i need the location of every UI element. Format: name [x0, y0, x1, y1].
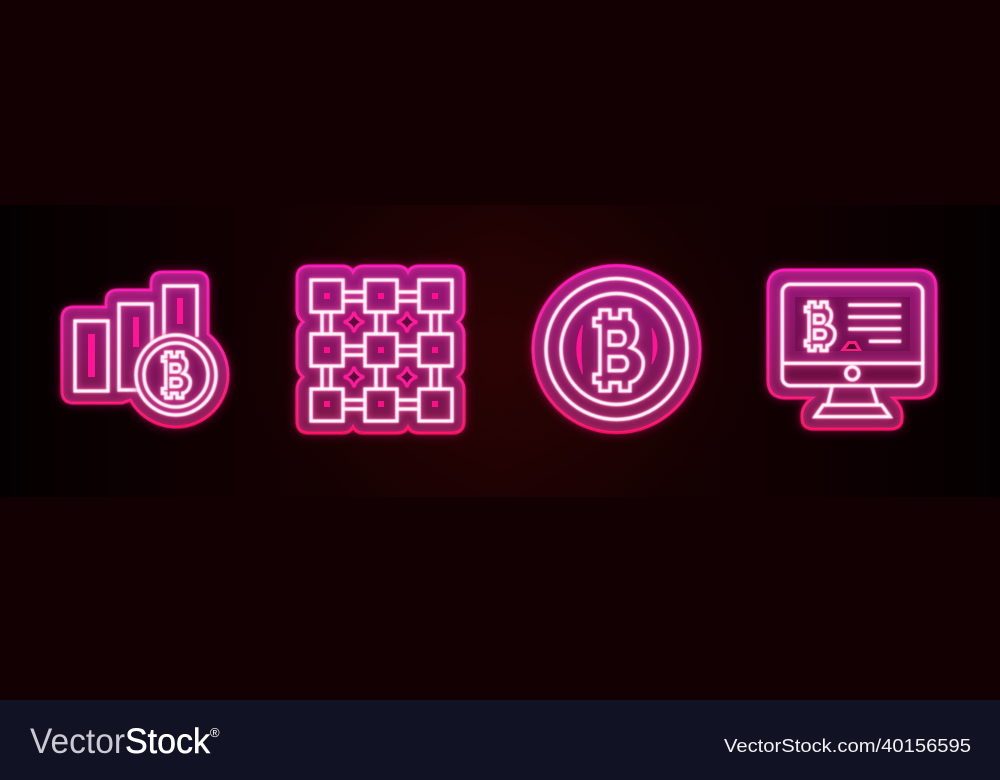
inner rim shade: [533, 266, 700, 432]
center dots: [324, 293, 438, 407]
lower bezel: [784, 365, 921, 384]
bars: [75, 286, 197, 391]
inner rim shade: [297, 266, 464, 433]
icon: bitcoin computer monitor: [768, 270, 936, 429]
monitor lines: [782, 284, 923, 417]
pink triangle: [840, 341, 862, 351]
background band: [0, 205, 1000, 497]
icon: blockchain grid: [297, 266, 464, 433]
bar slots: [88, 298, 183, 377]
bar chart badge outline: [62, 272, 228, 427]
bitcoin coin: [136, 335, 216, 415]
footer logo: Vector: [30, 722, 125, 761]
inner rim shade: [62, 272, 228, 427]
footer logo: ®: [210, 725, 220, 740]
monitor badge outline: [768, 270, 936, 429]
icon: bitcoin bar chart: [62, 272, 228, 427]
footer bar: [0, 700, 1000, 780]
footer logo: Stock: [125, 722, 210, 761]
side crescents: [577, 325, 657, 374]
footer logo: [30, 722, 220, 761]
coin rings and symbol: [546, 278, 687, 420]
screen panel: [795, 297, 910, 351]
grid badge outline: [297, 266, 464, 433]
inner rim shade: [768, 270, 936, 429]
coin outline: [533, 266, 700, 432]
network nodes and links: [311, 280, 452, 421]
footer image id: VectorStock.com/40156595: [724, 736, 971, 756]
icon: bitcoin coin: [533, 266, 700, 432]
star sparkles: [344, 312, 417, 387]
